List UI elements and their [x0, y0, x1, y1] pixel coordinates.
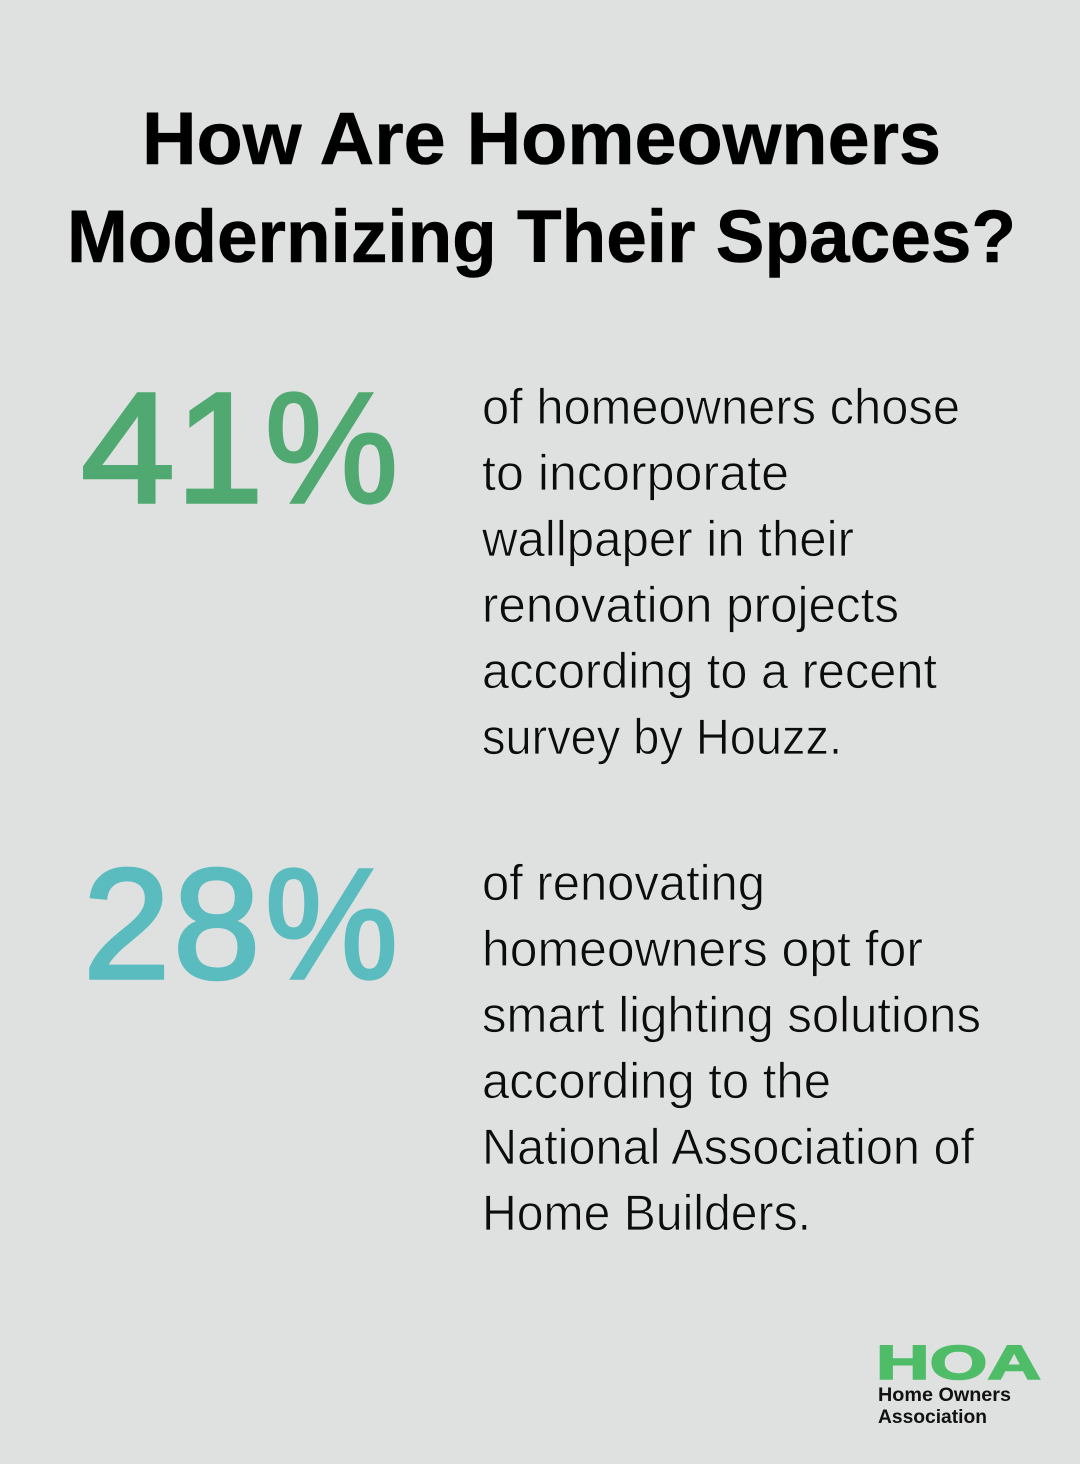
stat: 41%: 4 [81, 361, 175, 536]
text block: wallpaper statistic: renovation projects [482, 577, 899, 633]
title: Modernizing Their Spaces? [67, 195, 1016, 278]
title [67, 97, 1016, 278]
text block: wallpaper statistic [481, 379, 960, 765]
title: How Are Homeowners [142, 97, 941, 180]
logo: Home Owners Association: Home Owners [878, 1385, 1011, 1406]
logo: Home Owners Association [876, 1337, 1041, 1428]
text block: smart lighting statistic: homeowners opt for [482, 921, 923, 977]
stat: 41%: % [265, 361, 398, 536]
text block: wallpaper statistic: survey by Houzz. [482, 709, 842, 765]
text block: smart lighting statistic: according to the [482, 1053, 831, 1109]
stat: 28%: 8 [173, 837, 260, 1012]
text block: wallpaper statistic: of homeowners chose [482, 379, 960, 435]
text block: smart lighting statistic: smart lighting solutions [482, 987, 981, 1043]
logo: Home Owners Association: Association [878, 1407, 987, 1428]
logo: Home Owners Association: HOA [876, 1337, 1041, 1390]
text block: wallpaper statistic: according to a recent [482, 643, 937, 699]
text block: smart lighting statistic [482, 855, 981, 1241]
text block: smart lighting statistic: National Association of [482, 1119, 974, 1175]
text block: wallpaper statistic: to incorporate [482, 445, 789, 501]
stat: 28% [83, 837, 398, 1012]
stat: 28%: 2 [83, 837, 170, 1012]
text block: smart lighting statistic: Home Builders. [482, 1185, 811, 1241]
text block: wallpaper statistic: wallpaper in their [481, 511, 854, 567]
text block: smart lighting statistic: of renovating [482, 855, 765, 911]
stat: 41%: 1 [176, 361, 263, 536]
stat: 41% [81, 361, 398, 536]
stat: 28%: % [265, 837, 398, 1012]
